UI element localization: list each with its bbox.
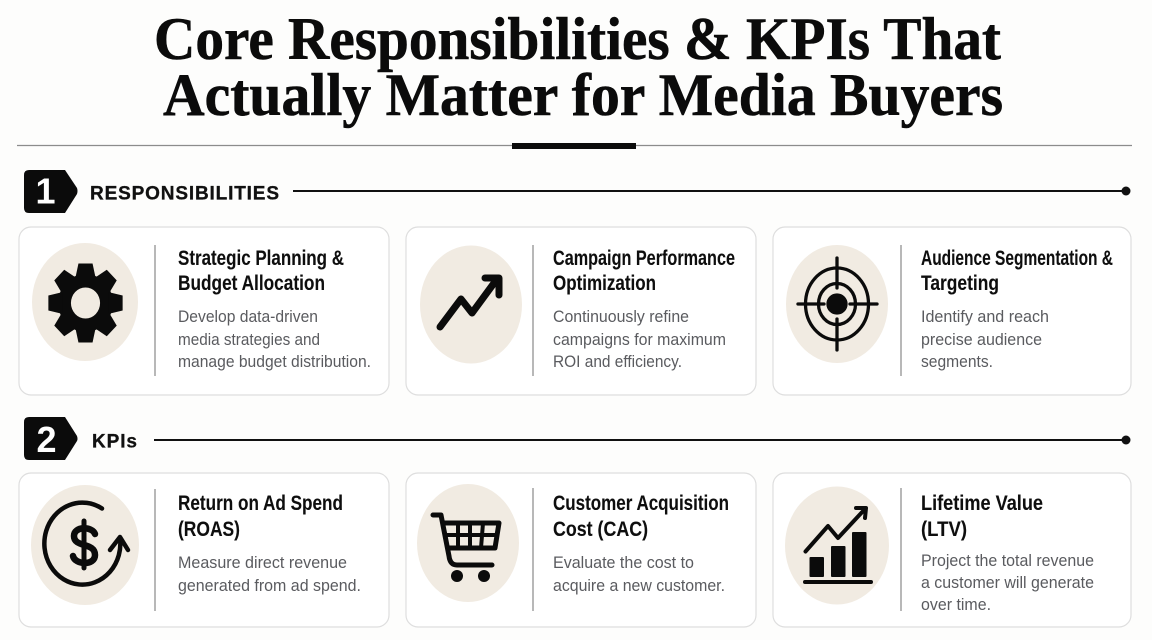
description: precise audience	[921, 331, 1042, 349]
title: Actually Matter for Media Buyers	[163, 62, 1003, 128]
icon: trend arrow	[440, 278, 499, 327]
description	[553, 308, 726, 371]
heading	[178, 247, 344, 295]
panel: CAC	[406, 473, 756, 627]
description: segments.	[921, 353, 993, 371]
description	[178, 554, 361, 595]
description	[553, 554, 725, 595]
description: acquire a new customer.	[553, 577, 725, 595]
description: Develop data-driven	[178, 308, 318, 326]
description: Evaluate the cost to	[553, 554, 694, 572]
description: manage budget distribution.	[178, 353, 371, 371]
description: campaigns for maximum	[553, 331, 726, 349]
icon: shopping cart	[433, 515, 499, 582]
icon: target	[798, 258, 877, 350]
title: Core Responsibilities & KPIs That	[154, 6, 1001, 72]
heading: Targeting	[921, 272, 999, 295]
heading	[921, 492, 1043, 541]
heading	[921, 247, 1113, 295]
heading: Strategic Planning &	[178, 247, 344, 270]
heading	[178, 492, 343, 541]
description: Measure direct revenue	[178, 554, 347, 572]
description: Continuously refine	[553, 308, 689, 326]
badge 1: 1	[35, 170, 56, 212]
section header: KPIs	[24, 417, 1130, 460]
description: over time.	[921, 596, 991, 614]
icon: gear	[48, 264, 123, 342]
description: ROI and efficiency.	[553, 353, 682, 371]
heading: Cost (CAC)	[553, 518, 648, 541]
description: a customer will generate	[921, 574, 1094, 592]
heading: Return on Ad Spend	[178, 492, 343, 515]
heading: (ROAS)	[178, 518, 240, 541]
panel: campaign performance	[406, 227, 756, 395]
heading	[553, 492, 729, 541]
panel: LTV	[773, 473, 1131, 627]
heading: Budget Allocation	[178, 272, 325, 295]
heading	[553, 247, 735, 295]
description	[921, 552, 1094, 614]
description	[178, 308, 371, 371]
badge 1	[24, 170, 78, 213]
badge 2	[24, 417, 78, 460]
section header: responsibilities: RESPONSIBILITIES	[90, 184, 279, 204]
description: Project the total revenue	[921, 552, 1094, 570]
heading: (LTV)	[921, 518, 967, 541]
heading: Campaign Performance	[553, 247, 735, 270]
heading: Optimization	[553, 272, 656, 295]
badge 2: 2	[36, 419, 57, 460]
panel: strategic planning	[19, 227, 389, 395]
description: media strategies and	[178, 331, 320, 349]
heading: Customer Acquisition	[553, 492, 729, 515]
description	[921, 308, 1049, 371]
description: Identify and reach	[921, 308, 1049, 326]
panel: audience segmentation	[773, 227, 1131, 395]
description: generated from ad spend.	[178, 577, 361, 595]
title	[154, 6, 1003, 128]
icon: growth chart	[805, 508, 871, 582]
heading: Lifetime Value	[921, 492, 1043, 515]
section header: KPIs: KPIs	[92, 432, 137, 452]
section header: responsibilities	[24, 170, 1130, 213]
panel: ROAS	[19, 473, 389, 627]
icon: dollar cycle	[44, 503, 128, 585]
